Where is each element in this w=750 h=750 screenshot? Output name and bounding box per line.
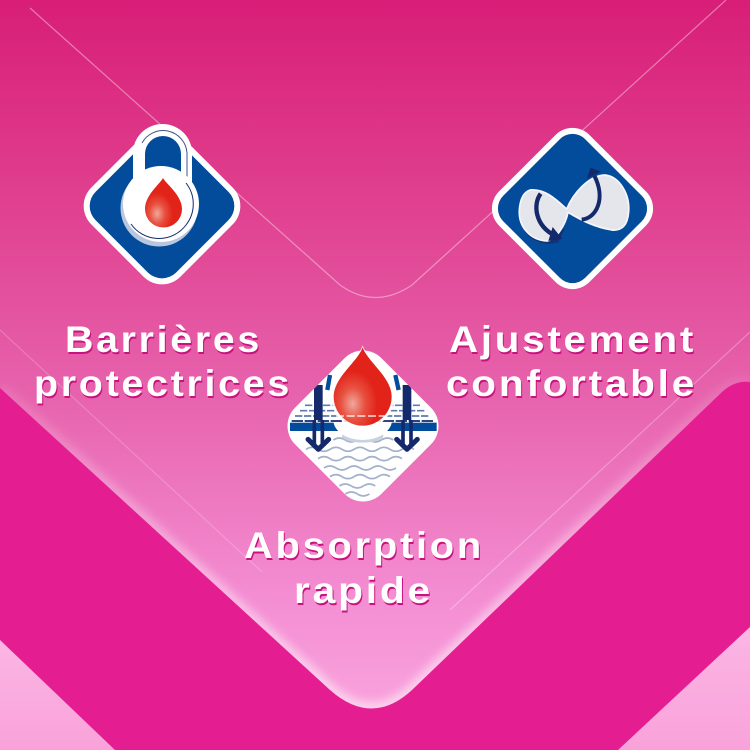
blue band (290, 423, 437, 431)
label: Absorption rapide: Absorption (245, 527, 485, 568)
shadow under drop (342, 434, 384, 443)
icon: padlock with drop (73, 117, 251, 295)
drop outline (331, 345, 394, 429)
icon: absorption drop (288, 346, 438, 502)
right arrow head (587, 168, 601, 179)
label: Barrières protectrices: protectrices (35, 365, 293, 406)
striped top sheet (295, 405, 430, 416)
right arrow (582, 176, 600, 220)
label: Barrières protectrices (34, 319, 293, 406)
label: Absorption rapide: rapide (294, 570, 433, 611)
icon: flexible pad with arrows (482, 118, 663, 299)
left arrow (536, 194, 555, 236)
pad shape (519, 175, 629, 241)
label: Ajustement confortable: confortable (447, 365, 698, 406)
white halo under drop (334, 422, 392, 440)
drop body (334, 347, 392, 426)
left arrow head (548, 227, 562, 241)
label: Absorption rapide (244, 525, 485, 613)
label: Ajustement confortable: confortable (446, 363, 697, 404)
label: Absorption rapide: Absorption (244, 525, 484, 566)
label: Barrières protectrices: Barrières (66, 321, 263, 362)
light corner bottom left (0, 640, 115, 750)
dark pink band (0, 382, 750, 750)
back sheet edges (327, 375, 399, 390)
left arrow (308, 385, 329, 449)
right arrow (397, 385, 417, 449)
label: Ajustement confortable: Ajustement (450, 321, 697, 362)
label: Barrières protectrices: protectrices (34, 363, 292, 404)
wavy core layers (306, 438, 414, 496)
dark line (292, 420, 433, 422)
pad shadow (522, 225, 565, 244)
label: Absorption rapide: rapide (295, 572, 434, 613)
light corner bottom right (618, 627, 750, 750)
label: Ajustement confortable (446, 319, 698, 406)
drop crossing line (336, 414, 389, 418)
label: Barrières protectrices: Barrières (65, 319, 262, 360)
label: Ajustement confortable: Ajustement (449, 319, 696, 360)
